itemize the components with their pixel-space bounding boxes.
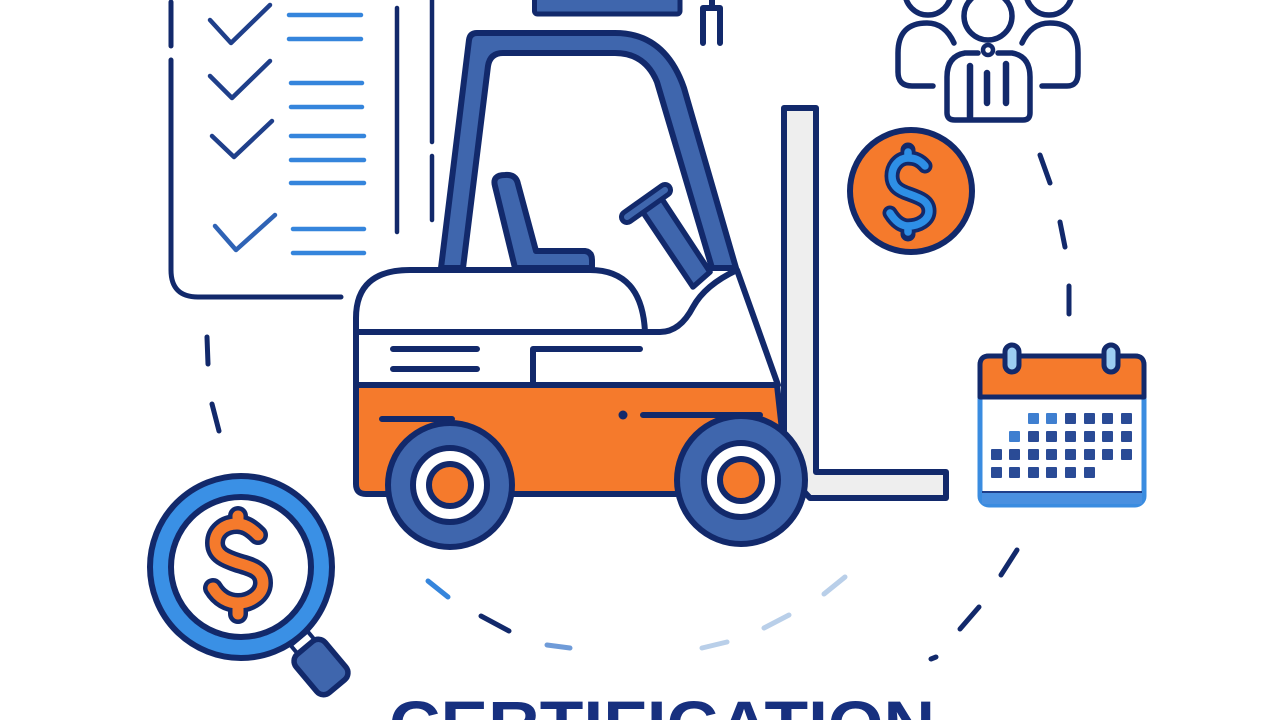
icon: dollar symbol, blue <box>890 150 929 234</box>
dashed connector circle <box>207 155 1069 659</box>
panel: checklist <box>171 0 432 297</box>
wheel left <box>388 423 512 547</box>
icon: dollar coin <box>850 130 972 252</box>
hood <box>356 270 645 332</box>
steering column <box>640 196 710 287</box>
mast <box>784 108 946 498</box>
icon: magnifying glass with dollar <box>150 476 352 698</box>
icon: calendar <box>980 345 1144 505</box>
icon: graduation cap fragment <box>534 0 720 43</box>
body details <box>393 349 640 385</box>
forklift <box>356 33 946 547</box>
icon: people group <box>898 0 1078 120</box>
body orange <box>356 385 782 494</box>
wheel right <box>677 416 805 544</box>
body upper <box>356 270 778 385</box>
icon: dollar symbol, orange <box>213 516 263 614</box>
steering wheel <box>627 190 665 217</box>
seat <box>494 175 592 268</box>
cab frame <box>441 33 736 268</box>
